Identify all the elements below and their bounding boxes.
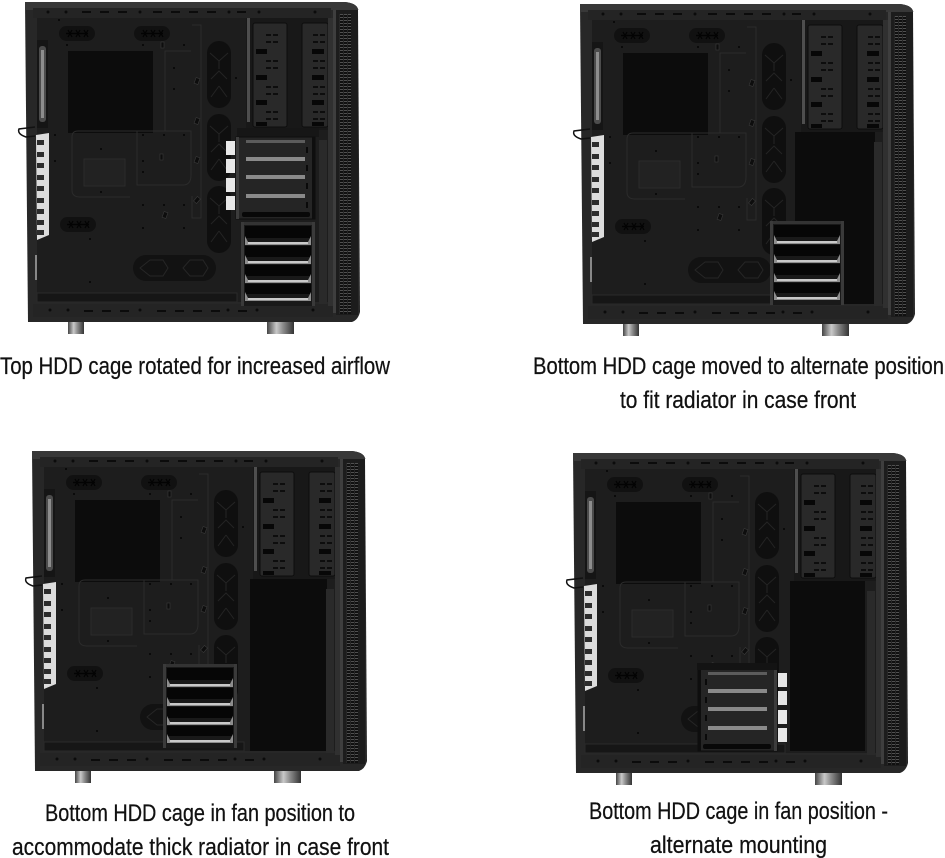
rotated cage with tabs on right [698,669,787,751]
case photo: cage moved [574,4,915,336]
caption [12,800,389,858]
case photo: rotated top cage [19,2,360,334]
caption: to fit radiator in case front [620,387,856,414]
caption: Bottom HDD cage in fan position - [589,798,888,825]
caption: Bottom HDD cage in fan position to [45,800,355,827]
bottom drive cage [241,222,315,306]
caption [589,798,888,858]
caption [533,353,944,414]
panel: bottom cage alternate position [533,4,944,414]
fan position drive cage [163,664,237,748]
panel: bottom cage in fan position, alternate mounting [567,453,908,858]
moved drive cage [770,221,844,305]
case photo: alternate mounting [567,453,908,785]
panel: top HDD cage rotated [0,2,391,380]
caption: Top HDD cage rotated for increased airflow [0,353,391,380]
case photo: cage in fan position [26,451,367,783]
panel: bottom cage in fan position [12,451,389,858]
